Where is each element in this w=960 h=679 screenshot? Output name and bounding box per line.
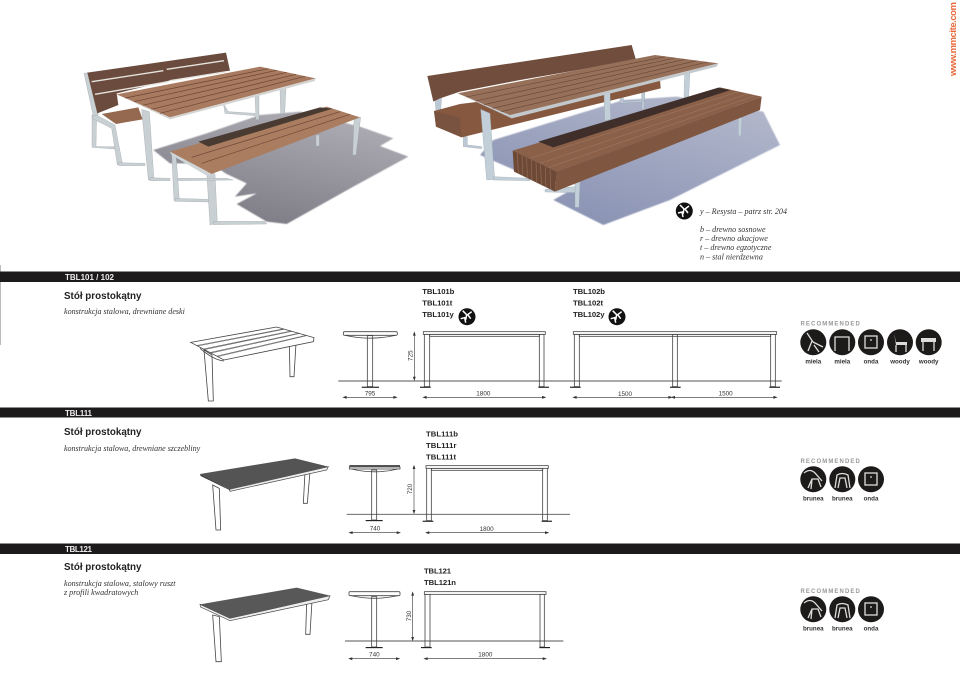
legend: material codes: r – drewno akacjowe [700,234,768,243]
ground shadow [153,112,408,224]
dimension values: 725 [407,350,414,361]
isometric table drawing [200,458,328,530]
dimension values: 1800 [476,390,491,397]
dimension values: 730 [406,610,413,621]
product codes: TBL111t [426,452,456,462]
front bench end grain [513,151,557,192]
side view [349,592,400,648]
legend [676,202,787,262]
product codes TBL101 [422,287,455,319]
icon: woody chair: woody [889,358,910,366]
rear bench backrest [87,53,230,113]
icon: brunea chair: brunea [803,626,824,632]
heading: Stół prostokątny [64,427,142,438]
icon: miela chair [800,329,826,366]
front bench seat [170,107,360,174]
recommended seating: RECOMMENDED [800,589,861,595]
product codes: TBL121n [424,578,456,587]
product codes [426,430,458,462]
legend: material codes: b – drewno sosnowe [700,225,766,234]
technical drawing with dimensions [347,465,570,534]
table top [458,55,718,115]
table legs [142,88,286,181]
technical drawing with dimensions [345,592,563,660]
dimension lines [349,592,546,660]
dimension values: 720 [407,483,414,494]
dimension lines [349,466,548,534]
isometric table drawing [200,588,330,662]
icon: woody bench [916,329,942,366]
front view [421,592,550,648]
icon: miela chair: miela [805,358,822,366]
legend: Resysta note: y – Resysta – patrz str. 204 [699,207,787,216]
icon: onda: onda [864,626,879,632]
crop mark at left edge [0,265,1,345]
rear bench backrest [427,45,636,102]
icon: brunea stool: brunea [832,496,853,502]
front bench slot [198,107,333,147]
table top [117,67,316,117]
dimension values: 1500 [719,391,733,398]
description: konstrukcja stalowa, drewniane deski [64,307,185,316]
dimension values: 1800 [478,652,493,659]
panel: TBL121 [63,562,884,662]
product codes: TBL121 [424,566,452,576]
description: konstrukcja stalowa, drewniane szczebliny [64,444,201,453]
recommended seating [800,589,884,632]
rear bench supports [435,90,645,149]
recommended seating: RECOMMENDED [800,459,861,465]
dimension values: 795 [365,391,376,398]
rear bench seat box [434,79,661,137]
ground shadow [480,97,780,225]
icon: Resysta badge TBL102 [608,308,626,325]
section header: TBL121: TBL121 [65,545,93,554]
recommended seating [800,459,884,502]
section header: TBL111: TBL111 [65,409,93,418]
front view [423,466,552,522]
front bench slat gaps [192,112,350,163]
recommended seating: RECOMMENDED [800,322,861,328]
table legs [481,72,690,181]
vertical website text: www.mmcite.com [948,2,959,77]
legend: material codes: n – stal nierdzewna [700,252,763,262]
section header: TBL101 / 102 [0,272,960,282]
dimension values: 740 [370,525,381,532]
icon: onda [858,329,884,366]
backrest slits [92,61,227,94]
icon: onda: onda [864,496,879,502]
product codes: TBL111r [426,441,456,450]
front bench legs [545,117,742,207]
legend: material codes: t – drewno egzotyczne [700,243,772,252]
section header: TBL121 [0,544,960,554]
description: z profili kwadratowych [63,588,138,597]
dimension values [365,350,733,398]
front bench top [513,87,762,172]
dimension values [370,483,494,533]
product codes TBL102 [573,287,605,319]
dimension values [369,610,493,659]
rear bench frame [84,73,255,166]
icon: woody chair [887,329,913,366]
panel: TBL101 / 102 [64,287,942,401]
front view TBL101 [420,332,549,388]
table slat gaps [467,57,707,112]
product codes: TBL111b [426,430,458,438]
dimension lines [343,332,777,398]
icon: woody bench: woody [918,358,939,366]
product codes TBL101: TBL101b [422,287,455,296]
front bench frame [172,117,361,225]
description [63,579,176,597]
front view TBL102 [570,332,780,388]
product codes TBL101: TBL101t [422,298,453,308]
heading: Stół prostokątny [64,291,142,302]
table slat gaps [125,69,305,113]
product codes TBL102: TBL102y [573,310,605,319]
icon: brunea chair: brunea [803,496,824,502]
icon: Resysta badge TBL101 [458,308,476,325]
legend: material codes [700,225,772,262]
icon: miela table [829,329,855,366]
rear bench seat [102,107,143,124]
product codes [424,566,456,587]
icon: miela table: miela [834,358,851,366]
technical drawing with dimensions [338,332,782,398]
recommended seating [800,322,942,366]
product render: bench and table with solid wooden benches [427,45,780,225]
icon: Resysta badge [676,202,693,220]
icon: brunea stool: brunea [832,626,853,632]
dimension values: 740 [369,651,380,658]
description: konstrukcja stalowa, stalowy ruszt [64,579,176,588]
product codes TBL102: TBL102b [573,287,605,296]
dimension values: 1800 [480,526,494,533]
icon: onda: onda [864,358,879,366]
section header: TBL111 [0,408,960,418]
product codes TBL102: TBL102t [573,298,603,308]
front bench slot [538,88,731,147]
side view [343,332,397,388]
panel: TBL111 [64,427,884,534]
dimension values: 1500 [618,391,633,398]
product codes TBL101: TBL101y [422,310,455,319]
isometric table drawing [191,327,314,401]
product render: bench and table with backrest, slatted [84,53,408,225]
section header: TBL101 / 102: TBL101 / 102 [65,273,115,282]
front bench front face [555,97,762,192]
side view [349,465,400,521]
heading: Stół prostokątny [64,562,142,573]
